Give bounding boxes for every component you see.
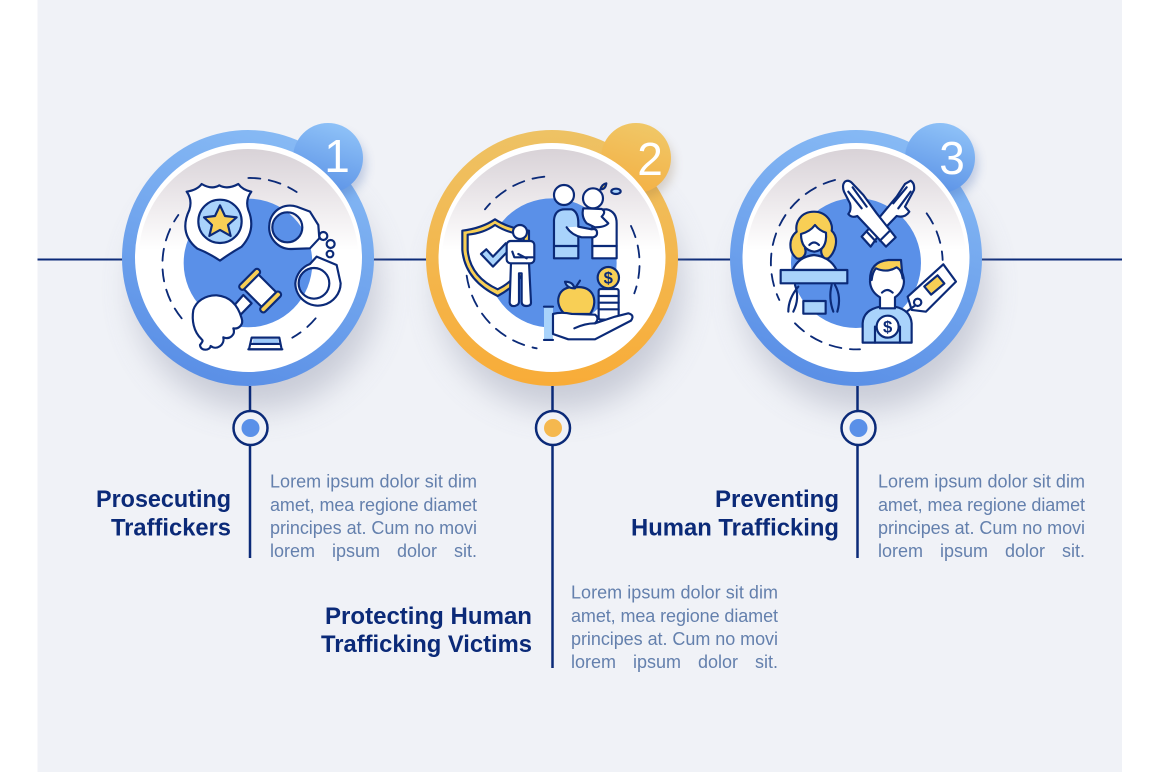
description 2: sit.: [755, 652, 778, 672]
circle medallion 1: [122, 123, 378, 410]
step 1: prosecuting traffickers: [96, 123, 477, 561]
heading 2: Protecting Human: [325, 603, 532, 630]
heading 1: Prosecuting: [96, 486, 231, 513]
ring marker 2: [536, 411, 570, 445]
ring marker 3: [842, 411, 876, 445]
connector line 2: [551, 386, 554, 668]
description 1: [270, 472, 477, 561]
description 3: sit.: [1062, 541, 1085, 561]
ring marker 1: [234, 411, 268, 445]
number badge 1: 1: [324, 130, 350, 182]
description 2: [571, 582, 778, 672]
description 1: lorem: [270, 541, 315, 561]
description 2: principes at. Cum no movi: [571, 629, 778, 649]
icon: badge, handcuffs and gavel: [162, 178, 341, 350]
description 2: amet, mea regione diamet: [571, 606, 778, 626]
description 2: Lorem ipsum dolor sit dim: [571, 582, 778, 602]
description 3: [878, 472, 1085, 561]
heading 2: [321, 603, 532, 658]
icon: protection, support and aid: $: [604, 269, 614, 288]
description 1: ipsum: [332, 541, 380, 561]
description 3: ipsum: [940, 541, 988, 561]
step 3: preventing human trafficking: [631, 123, 1085, 561]
number badge 2: 2: [637, 133, 663, 185]
description 1: sit.: [454, 541, 477, 561]
number badge 3: 3: [939, 132, 965, 184]
step 2: protecting human trafficking victims: [321, 123, 778, 672]
heading 1: [96, 486, 231, 542]
horizontal timeline: [38, 258, 1122, 260]
description 1: amet, mea regione diamet: [270, 495, 477, 515]
connector line 1: [249, 386, 251, 558]
heading 3: Human Trafficking: [631, 514, 839, 542]
description 1: dolor: [397, 541, 437, 561]
circle medallion 3: [730, 123, 986, 410]
description 2: dolor: [698, 652, 738, 672]
description 3: lorem: [878, 541, 923, 561]
description 2: ipsum: [633, 652, 681, 672]
heading 3: Preventing: [715, 486, 839, 513]
description 1: principes at. Cum no movi: [270, 518, 477, 538]
description 3: principes at. Cum no movi: [878, 518, 1085, 538]
description 3: Lorem ipsum dolor sit dim: [878, 472, 1085, 492]
description 3: dolor: [1005, 541, 1045, 561]
circle medallion 2: [426, 123, 682, 410]
heading 3: [631, 486, 839, 542]
description 3: amet, mea regione diamet: [878, 495, 1085, 515]
heading 2: Trafficking Victims: [321, 631, 532, 658]
description 1: Lorem ipsum dolor sit dim: [270, 472, 477, 492]
description 2: lorem: [571, 652, 616, 672]
connector line 3: [856, 386, 859, 558]
icon: victims and stop gesture: $: [883, 318, 893, 337]
icon: victims and stop gesture: [771, 180, 956, 349]
icon: protection, support and aid: [462, 177, 640, 348]
heading 1: Traffickers: [111, 514, 231, 542]
